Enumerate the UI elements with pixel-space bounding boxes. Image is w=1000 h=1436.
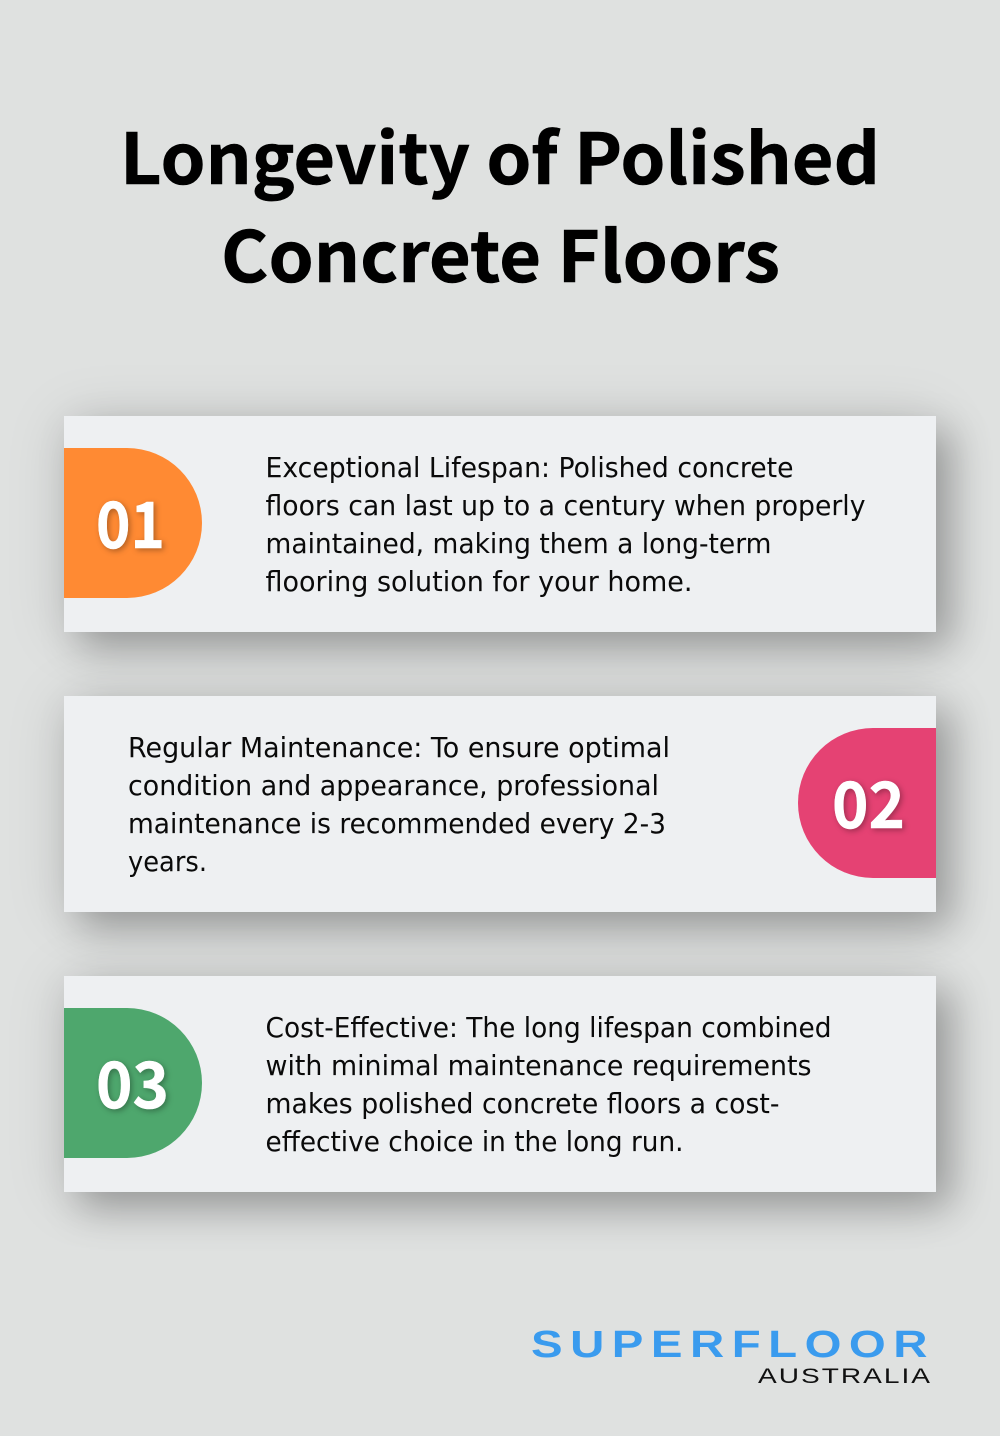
badge: 01 [64,448,202,598]
badge: 01: 01 [96,475,165,567]
badge: 02 [798,728,936,878]
logo: Superfloor Australia: SUPERFLOOR [531,1324,935,1366]
text block: card 1: Exceptional Lifespan: Polished concrete [266,452,794,484]
panel: card 1 background [64,416,936,632]
title [120,104,880,303]
logo: Superfloor Australia [531,1324,935,1388]
title: Concrete Floors [221,202,780,303]
text block: card 2: years. [128,846,207,878]
logo: Superfloor Australia: AUSTRALIA [758,1365,932,1388]
badge: 02: 02 [832,755,905,847]
badge: 03: 03 [96,1035,169,1127]
text block: card 1: floors can last up to a century when properly [266,490,866,522]
title: Longevity of Polished [120,104,880,205]
panel: card 2 background [64,696,936,912]
text block: card 2 [128,732,670,878]
badge: 03 [64,1008,202,1158]
text block: card 1: maintained, making them a long-term [266,528,772,560]
text block: card 2: Regular Maintenance: To ensure optimal [128,732,670,764]
text block: card 3: makes polished concrete floors a cost- [266,1088,780,1120]
panel: card 3 background [64,976,936,1192]
text block: card 2: condition and appearance, professional [128,770,659,802]
text block: card 1: flooring solution for your home. [266,566,692,598]
text block: card 3 [266,1012,832,1158]
text block: card 3: effective choice in the long run. [266,1126,684,1158]
text block: card 2: maintenance is recommended every 2-3 [128,808,666,840]
text block: card 1 [266,452,866,598]
text block: card 3: with minimal maintenance requirements [266,1050,812,1082]
text block: card 3: Cost-Effective: The long lifespan combined [266,1012,832,1044]
